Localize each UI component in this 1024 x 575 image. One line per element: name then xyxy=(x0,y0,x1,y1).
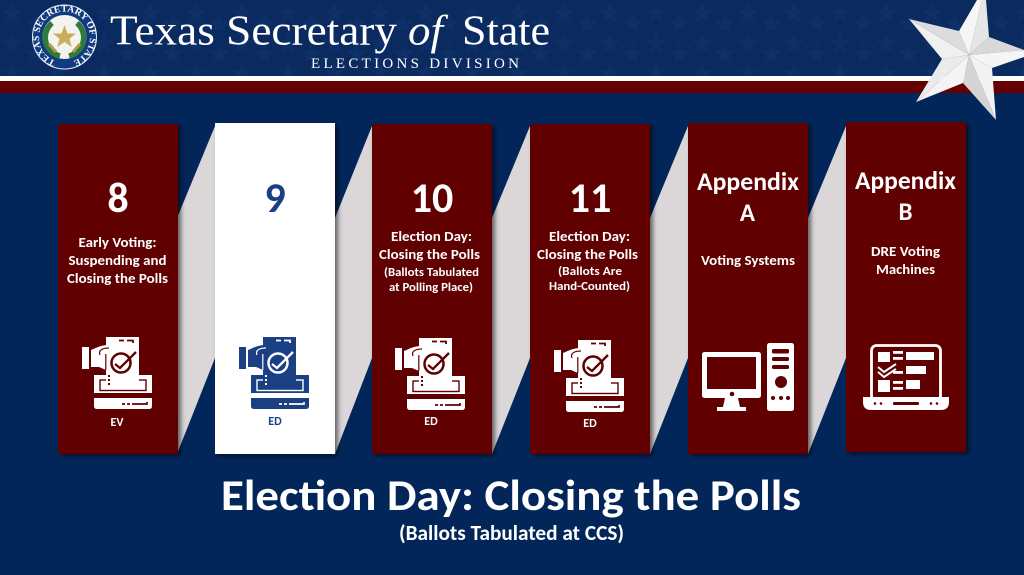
icon: ballot box xyxy=(82,337,152,409)
title: Texas Secretary of State: State xyxy=(462,8,550,54)
icon: silver star xyxy=(909,0,1024,120)
seal: Texas Secretary of State: TEXAS SECRETARY OF STATE xyxy=(32,5,96,66)
main subtitle: (Ballots Tabulated at CCS) xyxy=(399,520,624,546)
heading Appendix B xyxy=(855,165,957,227)
panel: chapter 8 xyxy=(58,124,178,454)
heading Appendix A xyxy=(697,166,800,228)
chapter number 9: 9 xyxy=(264,173,286,224)
icon: ballot box xyxy=(395,338,465,410)
heading Appendix B: B xyxy=(898,196,913,227)
connectors between panels xyxy=(177,126,846,454)
Appendix B description: DRE Voting xyxy=(871,242,940,260)
Appendix B description: Machines xyxy=(876,260,935,278)
chapter 10 description: Closing the Polls xyxy=(379,245,480,263)
Appendix A description: Voting Systems xyxy=(701,251,795,269)
chapter 8 description: Early Voting: xyxy=(78,233,156,251)
heading Appendix B: Appendix xyxy=(855,165,957,196)
heading Appendix A: A xyxy=(740,197,756,228)
chapter 8 description: Closing the Polls xyxy=(67,269,168,287)
header banner xyxy=(0,0,1024,93)
chapter 11 description: (Ballots Are xyxy=(558,264,622,279)
chapter 10 description: Election Day: xyxy=(391,227,472,245)
chapter 10 description: (Ballots Tabulated xyxy=(384,265,479,280)
chapter 11 description: Closing the Polls xyxy=(537,245,638,263)
Appendix B description xyxy=(871,242,940,278)
chapter 11 description xyxy=(537,227,638,294)
label ED: ED xyxy=(424,415,438,429)
heading Appendix A: Appendix xyxy=(697,166,800,197)
chapter number 11: 11 xyxy=(569,173,611,224)
panel: chapter 9 (highlighted) xyxy=(215,123,335,454)
title: Texas Secretary of State: Texas Secretary xyxy=(110,8,397,54)
chapter 8 description xyxy=(67,233,168,287)
panel: Appendix A xyxy=(688,123,808,454)
label ED: ED xyxy=(268,415,282,429)
chapter 11 description: Hand-Counted) xyxy=(549,279,630,294)
label EV: EV xyxy=(111,416,124,430)
panel: chapter 11 xyxy=(530,124,650,454)
main title: Election Day: Closing the Polls xyxy=(221,469,801,522)
chapter 10 description: at Polling Place) xyxy=(389,280,473,295)
icon: ballot box xyxy=(554,340,624,412)
panel: Appendix B xyxy=(846,122,966,452)
chapter 10 description xyxy=(379,227,480,295)
chapter number 8: 8 xyxy=(107,173,129,224)
panel: chapter 10 xyxy=(372,124,492,454)
title: Texas Secretary of State: of xyxy=(408,8,449,54)
subtitle: Elections Division: ELECTIONS DIVISION xyxy=(311,56,519,72)
icon: ballot box blue xyxy=(239,337,309,409)
icon: desktop computer xyxy=(702,343,794,411)
icon: laptop with ballot xyxy=(863,346,949,410)
chapter number 10: 10 xyxy=(411,173,453,224)
chapter 8 description: Suspending and xyxy=(68,251,166,269)
chapter 11 description: Election Day: xyxy=(549,227,630,245)
label ED: ED xyxy=(583,417,597,431)
title: Texas Secretary of State xyxy=(110,8,550,54)
